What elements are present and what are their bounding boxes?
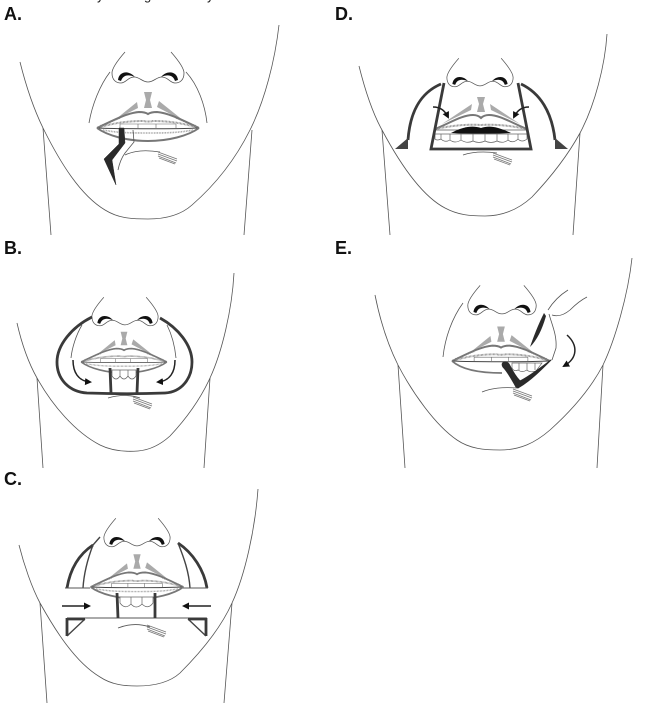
chin hatch C <box>147 625 166 637</box>
inner flap lines C <box>83 537 190 588</box>
chin hatch E <box>513 389 532 401</box>
right flap D <box>521 84 555 140</box>
neck A <box>43 128 252 235</box>
chin hatch A <box>158 152 177 164</box>
arrows C <box>62 605 89 607</box>
panel C <box>4 469 258 703</box>
teeth E <box>512 363 542 372</box>
chin hatch B <box>133 397 152 409</box>
chin crease B <box>108 395 140 398</box>
cheek folds A <box>89 72 207 123</box>
upper wedge cut E <box>530 313 546 347</box>
nose E <box>468 285 536 315</box>
flap edge E <box>549 314 556 360</box>
chin crease D <box>463 152 497 155</box>
label B: B. <box>4 238 22 258</box>
face outline C <box>19 489 258 686</box>
nose D <box>447 58 513 87</box>
cheek fold E <box>443 303 463 357</box>
wound line A <box>118 130 160 170</box>
lips B <box>81 332 167 373</box>
trapezoid incision D <box>431 83 531 149</box>
panel D <box>335 4 607 235</box>
incision A <box>104 128 125 185</box>
arrows B <box>73 360 90 382</box>
nose C <box>104 518 170 547</box>
cheek folds B <box>71 325 176 358</box>
neck E <box>398 365 603 468</box>
panel B <box>4 238 234 468</box>
label A: A. <box>4 4 22 24</box>
nose B <box>92 297 158 326</box>
lower triangles C <box>67 619 206 636</box>
vertical cuts C <box>117 593 155 618</box>
neck D <box>382 130 580 235</box>
label D: D. <box>335 4 353 24</box>
face outline D <box>359 34 607 216</box>
right triangle D <box>555 138 568 149</box>
neck C <box>40 603 232 703</box>
arrow E <box>564 335 575 366</box>
upper lip D <box>477 97 485 112</box>
nose A <box>112 52 184 83</box>
neck B <box>37 378 210 468</box>
teeth B <box>112 370 136 379</box>
lips E <box>452 326 550 362</box>
lip outline D <box>435 115 527 129</box>
vertical cuts B <box>110 368 138 393</box>
arrows D <box>433 107 448 117</box>
teeth D <box>435 134 527 142</box>
label E: E. <box>335 238 352 258</box>
face outline E <box>375 258 632 450</box>
lips A <box>97 92 199 141</box>
flap baselines C <box>65 588 208 618</box>
lips C <box>91 554 183 599</box>
chin crease C <box>118 624 150 628</box>
lower lip E <box>452 361 502 373</box>
lower V incision E <box>502 360 551 388</box>
finger E <box>548 290 587 316</box>
chin hatch D <box>493 153 512 165</box>
label C: C. <box>4 469 22 489</box>
upper flaps C <box>67 543 207 588</box>
panel E <box>335 238 632 468</box>
left flap D <box>408 84 441 140</box>
face outline B <box>17 273 234 451</box>
lip edge D <box>435 129 527 131</box>
lip hatch band D <box>435 125 527 129</box>
mouth opening D <box>451 127 511 134</box>
lip hatch D <box>442 104 520 124</box>
left triangle D <box>395 138 408 149</box>
panel A <box>4 4 279 235</box>
incision B <box>57 317 192 394</box>
teeth C <box>120 597 153 607</box>
face outline A <box>20 25 279 219</box>
chin crease E <box>482 388 517 392</box>
